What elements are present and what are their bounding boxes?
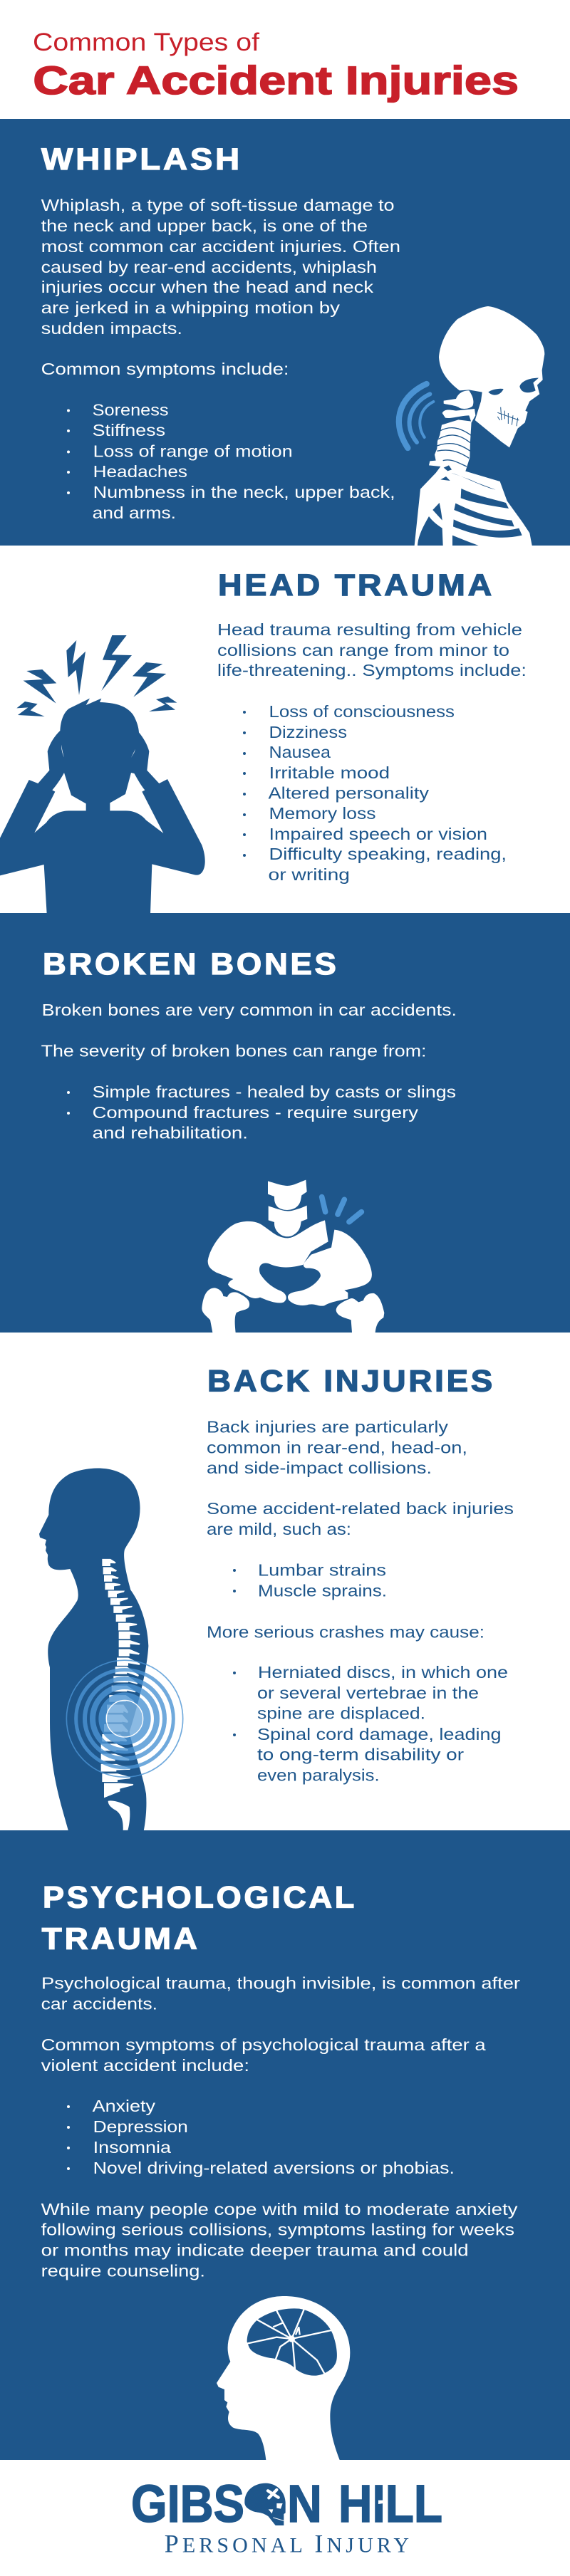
heading: psychological trauma: TRAUMA bbox=[42, 1923, 200, 1956]
heading: back injuries: BACK INJURIES bbox=[207, 1365, 495, 1399]
text block: psychological intro: car accidents. bbox=[41, 1995, 157, 2013]
text block: broken bones intro: The severity of broken bones can range from: bbox=[41, 1041, 427, 1060]
text block: back injuries intro bbox=[207, 1417, 514, 1538]
list: mild back injuries: Muscle sprains. bbox=[258, 1581, 387, 1600]
text block: whiplash intro: Common symptoms include: bbox=[41, 360, 289, 378]
icon: fractured pelvis bbox=[202, 1180, 384, 1333]
logo wordmark: GIBS bbox=[131, 2474, 244, 2533]
title line 1: Common Types of bbox=[33, 28, 259, 56]
list: head trauma symptoms: Irritable mood bbox=[269, 763, 390, 782]
text block: whiplash intro: injuries occur when the head and neck bbox=[41, 278, 373, 296]
text block: broken bones intro: Broken bones are very common in car accidents. bbox=[42, 1001, 457, 1019]
text block: psychological intro bbox=[41, 1974, 520, 2075]
text block: whiplash intro: most common car accident injuries. Often bbox=[41, 237, 400, 256]
text block: head trauma intro: Head trauma resulting from vehicle bbox=[217, 620, 522, 639]
text block: broken bones intro bbox=[41, 1001, 457, 1060]
list: psychological symptoms: Insomnia bbox=[93, 2138, 172, 2157]
panel: psychological trauma bbox=[0, 1830, 570, 2460]
list: head trauma symptoms: Nausea bbox=[269, 743, 331, 761]
text block: whiplash intro: sudden impacts. bbox=[41, 319, 182, 338]
list: head trauma symptoms bbox=[243, 702, 507, 884]
list: whiplash symptoms: Numbness in the neck, upper back, bbox=[93, 483, 395, 501]
panel: footer logo bbox=[0, 2460, 570, 2576]
list: serious back injuries: even paralysis. bbox=[257, 1766, 380, 1785]
heading: broken bones: BROKEN BONES bbox=[43, 948, 339, 981]
icon: skeleton with neck pain bbox=[399, 306, 544, 546]
logo wordmark: HILL bbox=[338, 2474, 442, 2533]
text block: whiplash intro: are jerked in a whipping motion by bbox=[41, 298, 340, 317]
logo wordmark: N bbox=[287, 2474, 322, 2533]
text block: back injuries intro: Back injuries are particularly bbox=[207, 1417, 448, 1436]
text block: psychological closing: following serious collisions, symptoms lasting for weeks bbox=[41, 2221, 514, 2239]
icon: person holding head with lightning bolts bbox=[0, 635, 205, 914]
text block: whiplash intro: Whiplash, a type of soft-tissue damage to bbox=[41, 196, 395, 214]
list: head trauma symptoms: Dizziness bbox=[269, 723, 347, 741]
list: psychological symptoms: Depression bbox=[93, 2117, 188, 2136]
list: serious back injuries: Herniated discs, in which one bbox=[258, 1663, 508, 1681]
list: psychological symptoms bbox=[67, 2097, 455, 2177]
panel: head trauma bbox=[0, 546, 570, 914]
list: fracture types bbox=[67, 1083, 456, 1142]
panel: whiplash bbox=[0, 119, 570, 546]
list: head trauma symptoms: Difficulty speaking, reading, bbox=[269, 845, 507, 863]
text block: serious crashes: More serious crashes may cause: bbox=[207, 1622, 484, 1641]
text block: whiplash intro: caused by rear-end accidents, whiplash bbox=[41, 258, 377, 276]
text block: psychological closing: While many people cope with mild to moderate anxiety bbox=[41, 2200, 518, 2218]
list: mild back injuries: Lumbar strains bbox=[258, 1561, 386, 1580]
text block: back injuries intro: common in rear-end, head-on, bbox=[207, 1438, 467, 1456]
list: whiplash symptoms bbox=[67, 400, 395, 522]
list: mild back injuries bbox=[233, 1561, 387, 1600]
list: fracture types: Compound fractures - require surgery bbox=[93, 1103, 418, 1122]
list: fracture types: and rehabilitation. bbox=[93, 1124, 248, 1142]
list: serious back injuries: or several vertebrae in the bbox=[257, 1684, 479, 1702]
list: serious back injuries bbox=[233, 1663, 508, 1785]
text block: whiplash intro bbox=[41, 196, 400, 378]
list: head trauma symptoms: Impaired speech or vision bbox=[269, 825, 487, 843]
list: whiplash symptoms: Headaches bbox=[93, 462, 187, 481]
text block: whiplash intro: the neck and upper back, is one of the bbox=[41, 217, 368, 235]
text block: head trauma intro bbox=[217, 620, 527, 679]
list: head trauma symptoms: Altered personality bbox=[268, 783, 429, 802]
text block: psychological closing: require counseling. bbox=[41, 2262, 205, 2280]
list: head trauma symptoms: Memory loss bbox=[269, 804, 376, 823]
text block: back injuries intro: are mild, such as: bbox=[207, 1520, 351, 1538]
text block: head trauma intro: life-threatening.. Symptoms include: bbox=[217, 661, 527, 679]
list: serious back injuries: Spinal cord damage, leading bbox=[257, 1725, 502, 1743]
text block: psychological closing bbox=[41, 2200, 518, 2280]
heading: head trauma: HEAD TRAUMA bbox=[218, 569, 494, 603]
icon: human profile with spine and pain rings bbox=[39, 1469, 183, 1831]
logo icon: skull bbox=[244, 2483, 385, 2525]
list: psychological symptoms: Novel driving-related aversions or phobias. bbox=[93, 2159, 455, 2177]
list: head trauma symptoms: Loss of consciousness bbox=[269, 702, 455, 721]
list: head trauma symptoms: or writing bbox=[268, 865, 350, 884]
panel: header bbox=[0, 0, 570, 119]
text block: back injuries intro: Some accident-related back injuries bbox=[207, 1499, 514, 1518]
title line 2: Car Accident Injuries bbox=[33, 58, 519, 103]
panel: back injuries bbox=[0, 1333, 570, 1831]
list: serious back injuries: spine are displaced. bbox=[257, 1704, 425, 1723]
list: whiplash symptoms: Stiffness bbox=[93, 421, 165, 439]
icon: head with shattered brain bbox=[217, 2296, 350, 2460]
heading: psychological trauma bbox=[42, 1882, 357, 1956]
list: serious back injuries: to ong-term disability or bbox=[257, 1746, 464, 1764]
list: whiplash symptoms: and arms. bbox=[93, 504, 176, 522]
text block: head trauma intro: collisions can range from minor to bbox=[217, 641, 509, 659]
panel: broken bones bbox=[0, 913, 570, 1333]
text block: psychological intro: Common symptoms of psychological trauma after a bbox=[41, 2035, 487, 2054]
list: psychological symptoms: Anxiety bbox=[93, 2097, 155, 2115]
logo subtitle: PERSONAL INJURY bbox=[165, 2529, 409, 2557]
list: fracture types: Simple fractures - healed by casts or slings bbox=[93, 1083, 456, 1101]
text block: back injuries intro: and side-impact collisions. bbox=[207, 1459, 432, 1477]
text block: psychological closing: or months may indicate deeper trauma and could bbox=[41, 2241, 469, 2260]
heading: whiplash: WHIPLASH bbox=[41, 143, 242, 177]
text block: psychological intro: Psychological trauma, though invisible, is common after bbox=[41, 1974, 520, 1993]
list: whiplash symptoms: Soreness bbox=[93, 400, 169, 419]
logo wordmark bbox=[131, 2474, 442, 2533]
text block: psychological intro: violent accident include: bbox=[41, 2056, 249, 2075]
list: whiplash symptoms: Loss of range of motion bbox=[93, 442, 293, 460]
heading: psychological trauma: PSYCHOLOGICAL bbox=[43, 1882, 357, 1915]
